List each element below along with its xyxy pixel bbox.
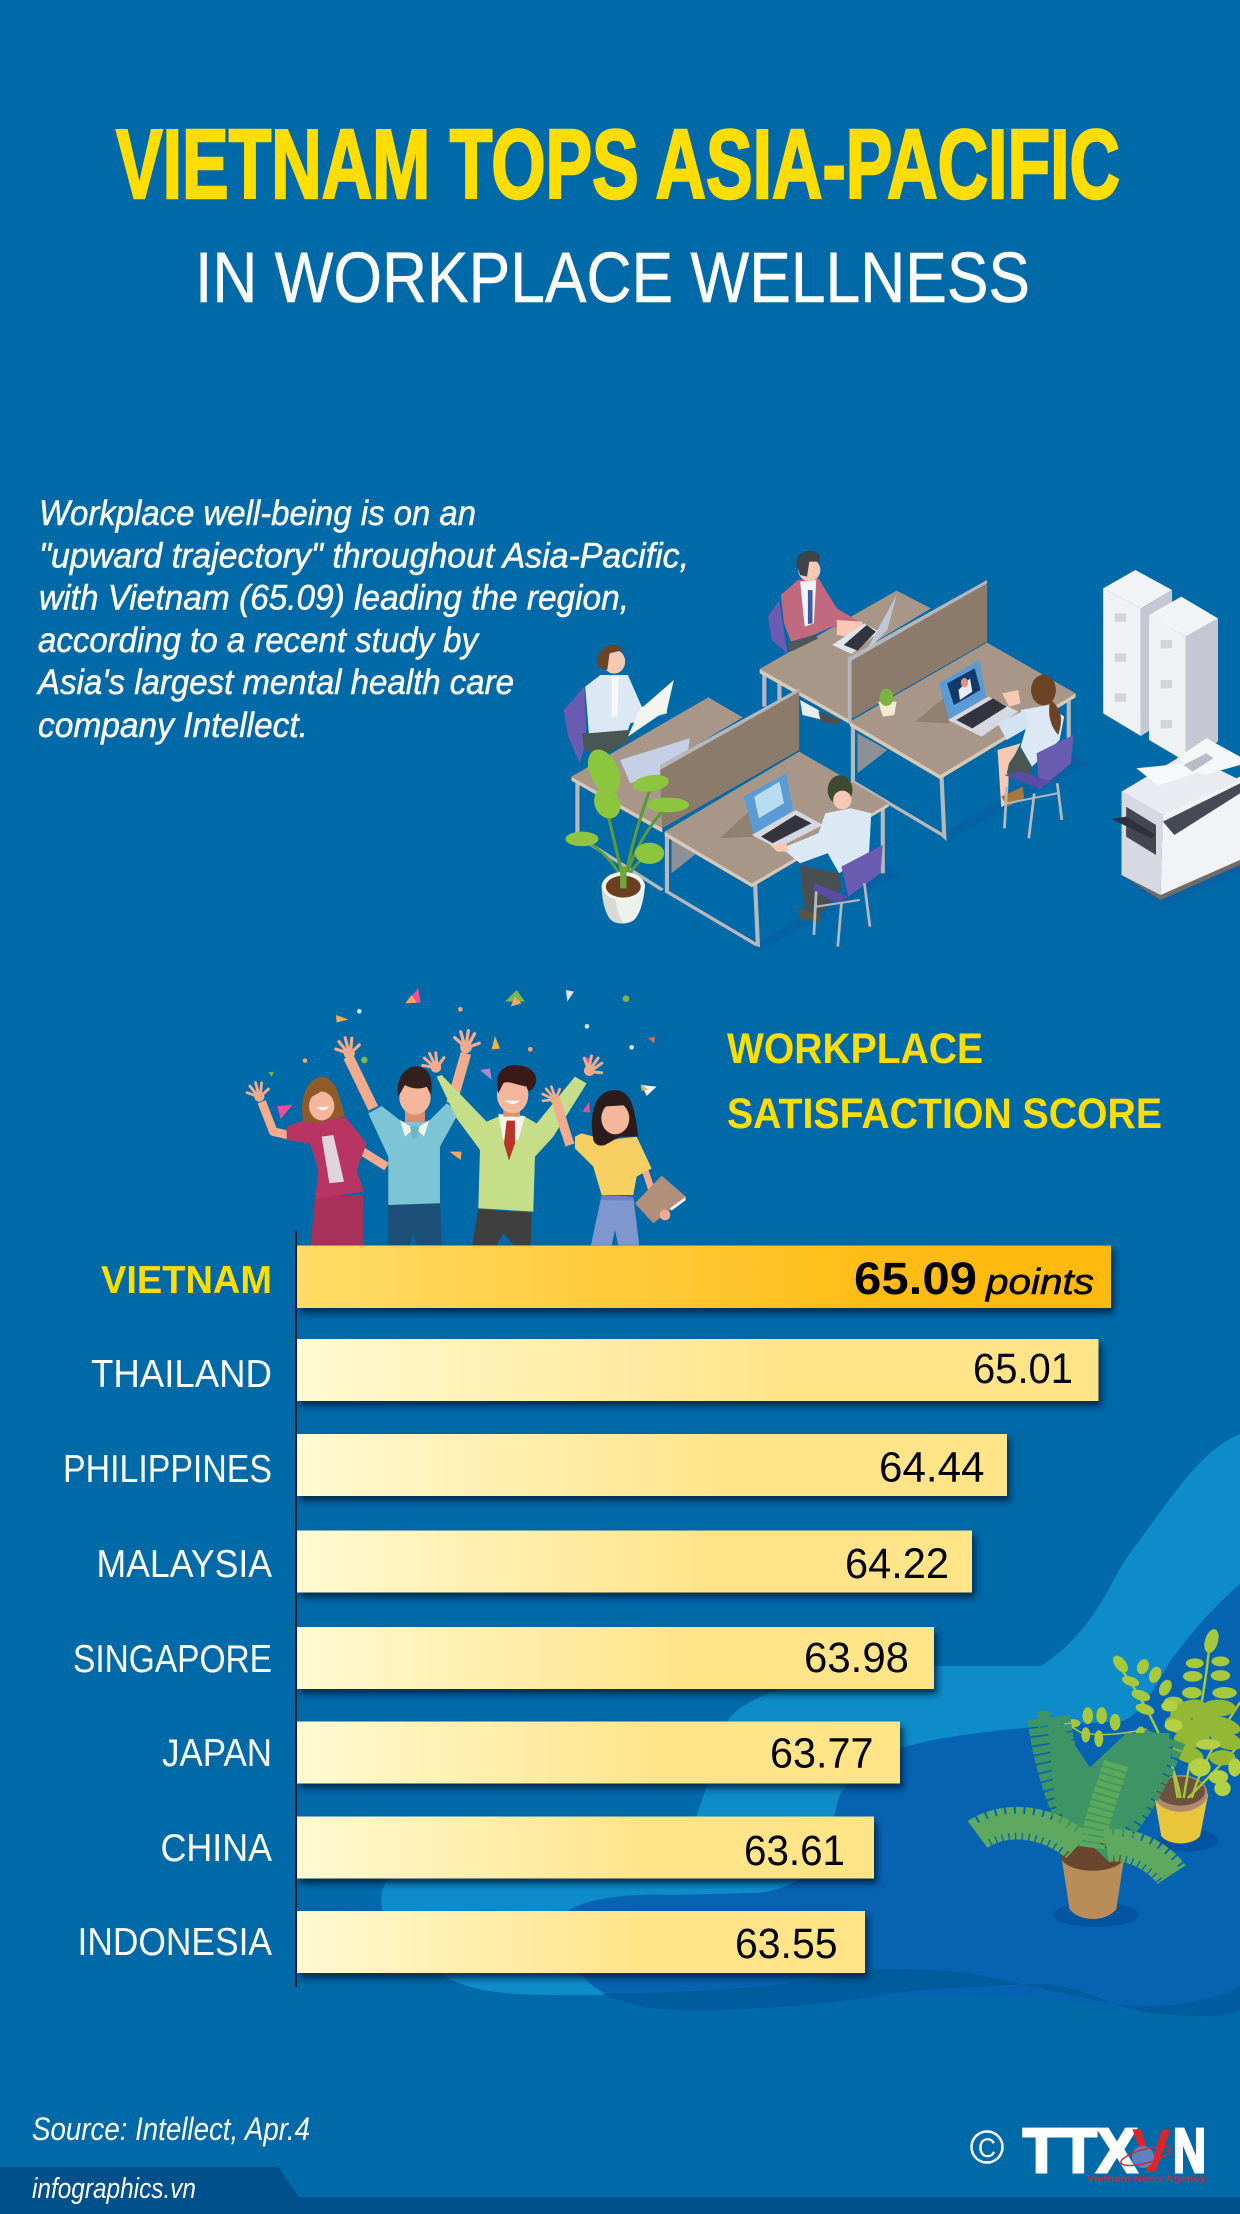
- bar: China: [160, 1816, 874, 1878]
- bar: Indonesia: 63.55: [735, 1920, 838, 1968]
- floor plant: [565, 747, 689, 924]
- TTXVN logo: Vietnam News Agency: [1087, 2173, 1206, 2185]
- confetti: [268, 988, 657, 1160]
- photocopier: [1111, 738, 1240, 900]
- bar: Vietnam: points: [985, 1261, 1094, 1302]
- front desks: [564, 645, 889, 947]
- chair woman left: [564, 687, 587, 763]
- TTXVN logo: TTX: [1023, 2117, 1137, 2186]
- bar: China: 63.61: [744, 1827, 845, 1875]
- bar: Thailand: [91, 1339, 1098, 1401]
- website: infographics.vn: [32, 2173, 196, 2205]
- woman right: [998, 675, 1073, 838]
- man in blue shirt: [334, 1035, 466, 1245]
- TTXVN logo: V: [1132, 2117, 1171, 2186]
- bar: Malaysia: [96, 1530, 972, 1592]
- bar: China: CHINA: [160, 1827, 272, 1870]
- chair man pink: [768, 600, 787, 653]
- filing cabinets: [1103, 570, 1218, 762]
- axis line: [295, 1231, 297, 1987]
- bar: Philippines: PHILIPPINES: [63, 1448, 272, 1491]
- intro paragraph: "upward trajectory" throughout Asia-Pacific,: [39, 536, 689, 576]
- woman in yellow top: [538, 1082, 687, 1245]
- woman left: [582, 645, 674, 755]
- bar: Japan: JAPAN: [162, 1732, 272, 1775]
- laptop right: [915, 693, 949, 723]
- man front: [770, 775, 883, 947]
- intro paragraph: Asia's largest mental health care: [36, 663, 514, 702]
- potted plants: [978, 1628, 1240, 1927]
- back desks: [760, 551, 1076, 838]
- bar: Vietnam: 65.09: [854, 1253, 977, 1304]
- bar: Vietnam: [101, 1246, 1111, 1308]
- bar: Japan: 63.77: [770, 1730, 874, 1778]
- floor shadows: [672, 753, 1240, 952]
- copyright icon: [972, 2132, 1002, 2163]
- bar chart: [63, 1231, 1111, 1987]
- upright fronds: [1047, 1718, 1169, 1844]
- bar: Philippines: [63, 1434, 1007, 1496]
- bar: Thailand: 65.01: [973, 1345, 1073, 1393]
- title line 2: IN WORKPLACE WELLNESS: [195, 239, 1030, 318]
- office illustration: [564, 551, 1240, 952]
- bar: Japan: [162, 1722, 900, 1784]
- small plant: [878, 702, 897, 717]
- fern plant: [978, 1707, 1171, 1927]
- low fronds: [978, 1823, 1078, 1846]
- intro paragraph: according to a recent study by: [38, 621, 480, 660]
- bar: Indonesia: [78, 1911, 865, 1973]
- front laptop: [720, 807, 754, 838]
- bar: Singapore: SINGAPORE: [73, 1638, 272, 1681]
- TTXVN logo: N: [1173, 2117, 1206, 2186]
- man in green sweater: [419, 1029, 607, 1245]
- intro paragraph: company Intellect.: [38, 706, 308, 745]
- woman in red suit: [245, 1077, 387, 1245]
- bar: Indonesia: INDONESIA: [78, 1921, 272, 1964]
- bar: Malaysia: MALAYSIA: [96, 1543, 272, 1586]
- celebrating people illustration: [245, 988, 687, 1245]
- intro paragraph: Workplace well-being is on an: [39, 494, 476, 533]
- bar: Singapore: [73, 1627, 934, 1689]
- copyright icon: C: [978, 2133, 996, 2163]
- intro paragraph: [36, 494, 689, 745]
- dense foliage: [1163, 1695, 1240, 1767]
- TTXVN logo: [1023, 2117, 1206, 2186]
- bar: Malaysia: 64.22: [845, 1540, 949, 1588]
- chart heading: SATISFACTION SCORE: [727, 1090, 1162, 1138]
- bar: Thailand: THAILAND: [91, 1353, 272, 1396]
- footer band: [0, 2167, 1240, 2214]
- background wave shapes: [381, 1434, 1240, 2016]
- intro paragraph: with Vietnam (65.09) leading the region,: [39, 578, 629, 618]
- bar: Vietnam: VIETNAM: [101, 1259, 272, 1302]
- title: [116, 109, 1120, 318]
- source note: Source: Intellect, Apr.4: [32, 2111, 310, 2147]
- bar: Singapore: 63.98: [804, 1634, 909, 1682]
- partition back: [850, 581, 987, 720]
- front partition: [660, 690, 799, 828]
- chart heading: WORKPLACE: [727, 1025, 983, 1073]
- yellow pot plant: [1110, 1628, 1240, 1852]
- bar: Philippines: 64.44: [879, 1444, 984, 1492]
- man in pink: [781, 551, 897, 654]
- chart heading: [727, 1025, 1162, 1138]
